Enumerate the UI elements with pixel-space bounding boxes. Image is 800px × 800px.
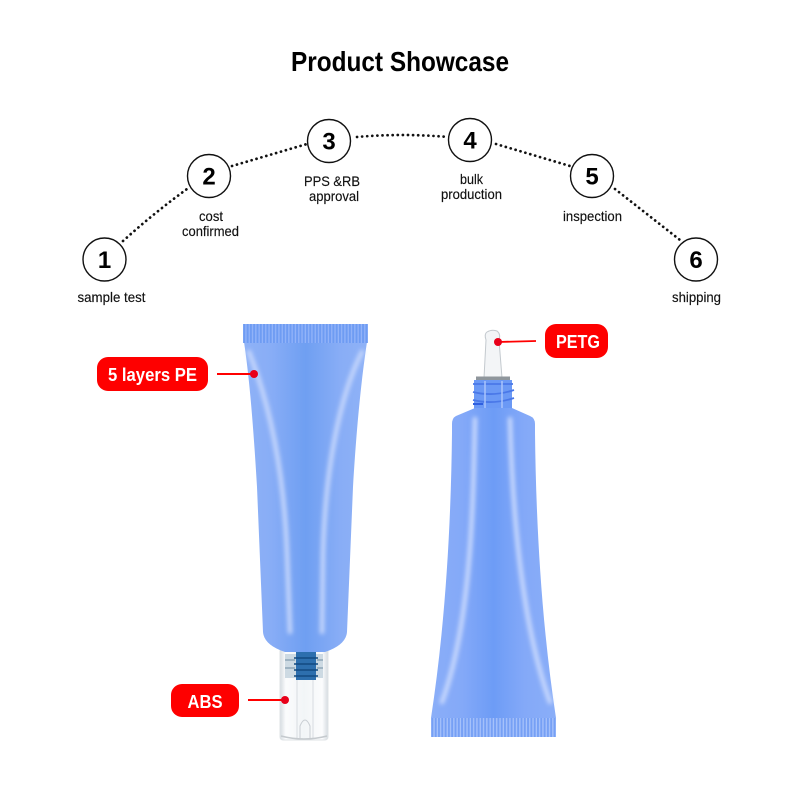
callout: ABS: ABS — [188, 691, 222, 712]
tube body — [244, 342, 367, 652]
body highlights — [442, 419, 550, 702]
title: Product Showcase — [291, 46, 509, 77]
step 3: PPS &RB approval: approval — [309, 188, 359, 204]
callout: 5 layers PE — [97, 357, 258, 391]
step 4: bulk production: production — [441, 186, 502, 202]
step 6: shipping — [672, 238, 721, 305]
step 3: PPS &RB approval: 3 — [322, 128, 336, 156]
step 6: shipping: 6 — [689, 247, 703, 274]
right tube with PETG tip — [431, 330, 556, 737]
step 3: PPS &RB approval — [304, 120, 360, 204]
step 5: inspection: 5 — [585, 164, 599, 190]
callout: ABS — [171, 684, 289, 717]
body highlights — [249, 352, 362, 632]
process timeline — [78, 118, 721, 305]
clear nozzle cap — [280, 648, 328, 740]
step 2: cost confirmed: confirmed — [182, 223, 239, 239]
step 3: PPS &RB approval: PPS &RB — [304, 173, 360, 189]
step 2: cost confirmed: cost — [199, 208, 223, 224]
step 1: sample test: 1 — [98, 247, 111, 274]
ribbed crimp — [431, 718, 556, 737]
step 5: inspection — [563, 154, 622, 224]
step 1: sample test — [78, 238, 146, 305]
callout: 5 layers PE: 5 layers PE — [108, 364, 197, 385]
step 5: inspection: inspection — [563, 208, 622, 224]
dotted connector arc — [123, 135, 680, 241]
PETG tip — [484, 330, 502, 378]
ribbed crimp — [243, 324, 368, 343]
callout: PETG — [494, 324, 608, 358]
callout: PETG: PETG — [556, 331, 600, 352]
step 4: bulk production: bulk — [460, 171, 484, 187]
threaded neck — [473, 380, 514, 410]
tube body — [431, 408, 556, 718]
step 2: cost confirmed — [182, 154, 239, 239]
left tube with clear nozzle — [243, 324, 368, 740]
step 4: bulk production — [441, 118, 502, 202]
step 4: bulk production: 4 — [463, 128, 477, 154]
step 6: shipping: shipping — [672, 289, 721, 305]
step 2: cost confirmed: 2 — [202, 164, 216, 190]
step 1: sample test: sample test — [78, 289, 146, 305]
